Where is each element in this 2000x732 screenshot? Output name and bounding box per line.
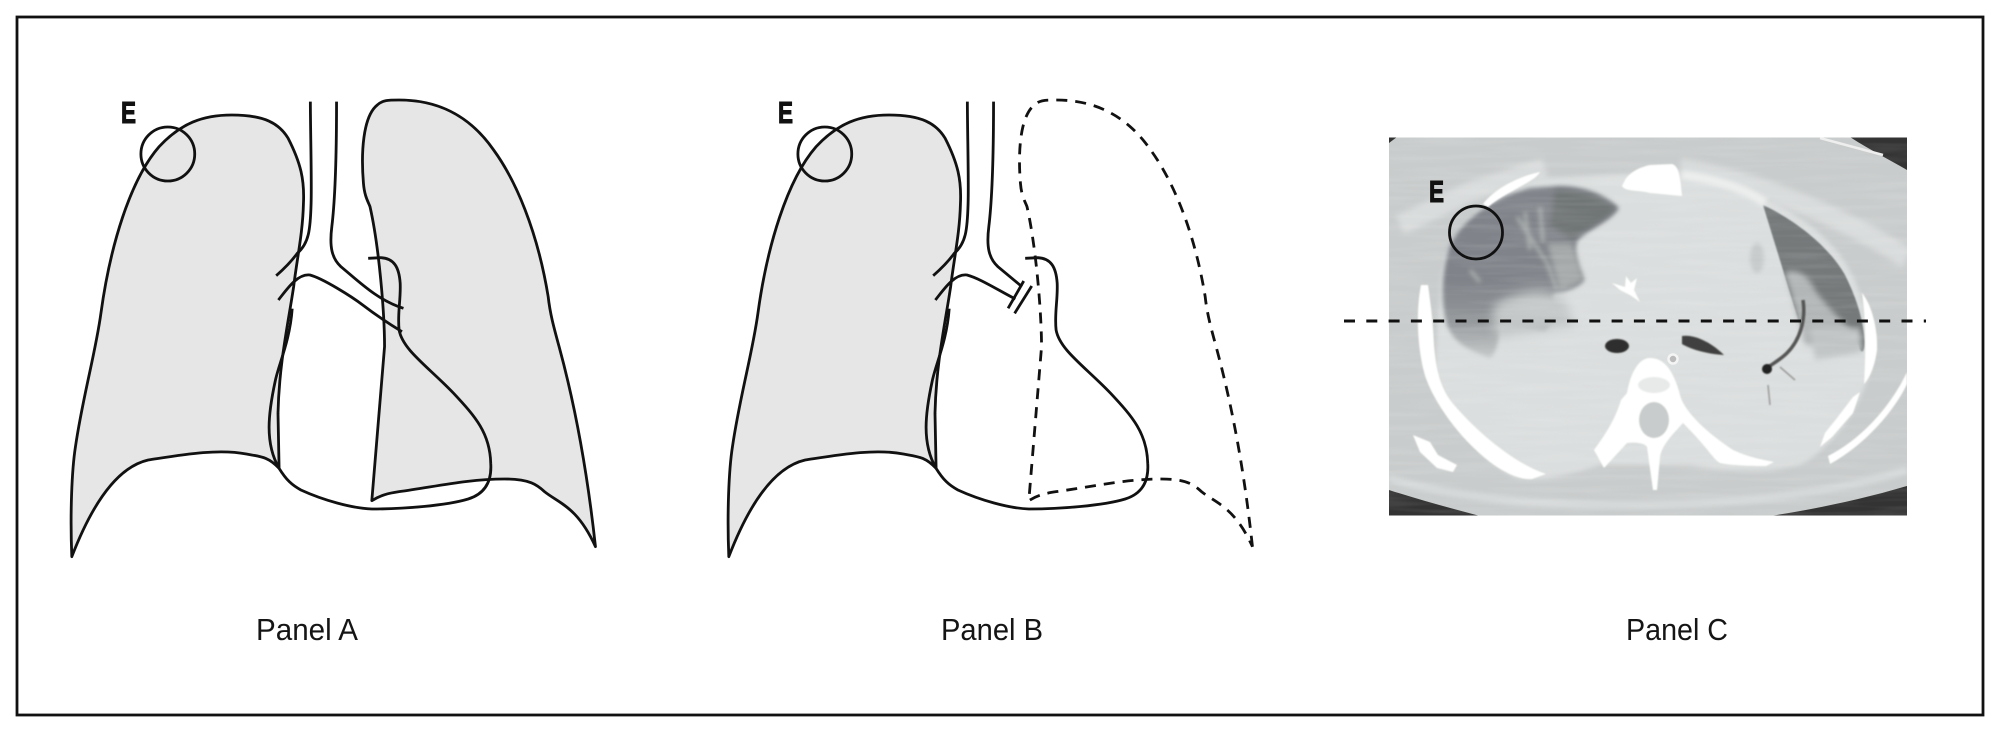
costal cartilage — [1682, 175, 1765, 203]
panel B: lung diagram after pneumonectomy — [728, 100, 1252, 557]
lung streaks — [1470, 207, 1557, 290]
darker anterior lung — [1550, 190, 1616, 240]
airways — [1605, 300, 1804, 405]
label Panel A: Panel A — [256, 612, 358, 647]
sternum — [1622, 164, 1682, 196]
label E panel A: E — [121, 95, 136, 130]
left lung aerated area — [1750, 205, 1865, 360]
spinal canal — [1639, 402, 1669, 438]
circle E — [1450, 206, 1502, 259]
right lung — [71, 115, 304, 557]
spine — [1594, 358, 1774, 490]
dashed section line — [1344, 320, 1926, 322]
vertebral body texture — [1638, 377, 1670, 393]
trachea and right bronchus — [276, 102, 311, 276]
dashed removed left lung — [1019, 100, 1252, 547]
heart outline — [926, 258, 1148, 509]
CT body — [1389, 137, 1907, 516]
ground glass region — [1547, 243, 1584, 292]
right lung — [728, 115, 961, 557]
label Panel C: Panel C — [1626, 612, 1728, 647]
label E panel B: E — [778, 95, 793, 130]
right lung aerated area — [1443, 186, 1619, 358]
pulmonary artery stump — [935, 275, 1015, 300]
circle E — [798, 127, 852, 181]
bronchial stump — [988, 102, 1022, 287]
bottom tissue band — [1389, 470, 1907, 505]
top-right skin line — [1820, 138, 1883, 155]
thorax interior — [1435, 172, 1870, 479]
trachea and left bronchus — [331, 102, 403, 308]
ligation ticks — [1008, 281, 1032, 313]
left lung — [362, 100, 595, 547]
panel A: lung diagram — [71, 100, 595, 557]
pericardial patch — [1750, 243, 1764, 273]
heart outline — [269, 258, 491, 509]
label Panel B: Panel B — [941, 612, 1043, 647]
ribs — [1413, 172, 1907, 479]
circle E — [141, 127, 195, 181]
trachea and right bronchus — [933, 102, 968, 276]
left lung lower ground glass — [1785, 271, 1850, 350]
consolidation — [1493, 292, 1575, 338]
label E panel C: E — [1429, 174, 1444, 209]
CT texture — [1389, 138, 1907, 516]
left lung patchy base — [1810, 328, 1862, 360]
CT background corners — [1389, 138, 1907, 516]
pulmonary artery — [278, 275, 402, 332]
chest wall bands — [1400, 168, 1907, 258]
panel C: CT scan — [1389, 137, 1907, 516]
central device — [1612, 276, 1640, 302]
